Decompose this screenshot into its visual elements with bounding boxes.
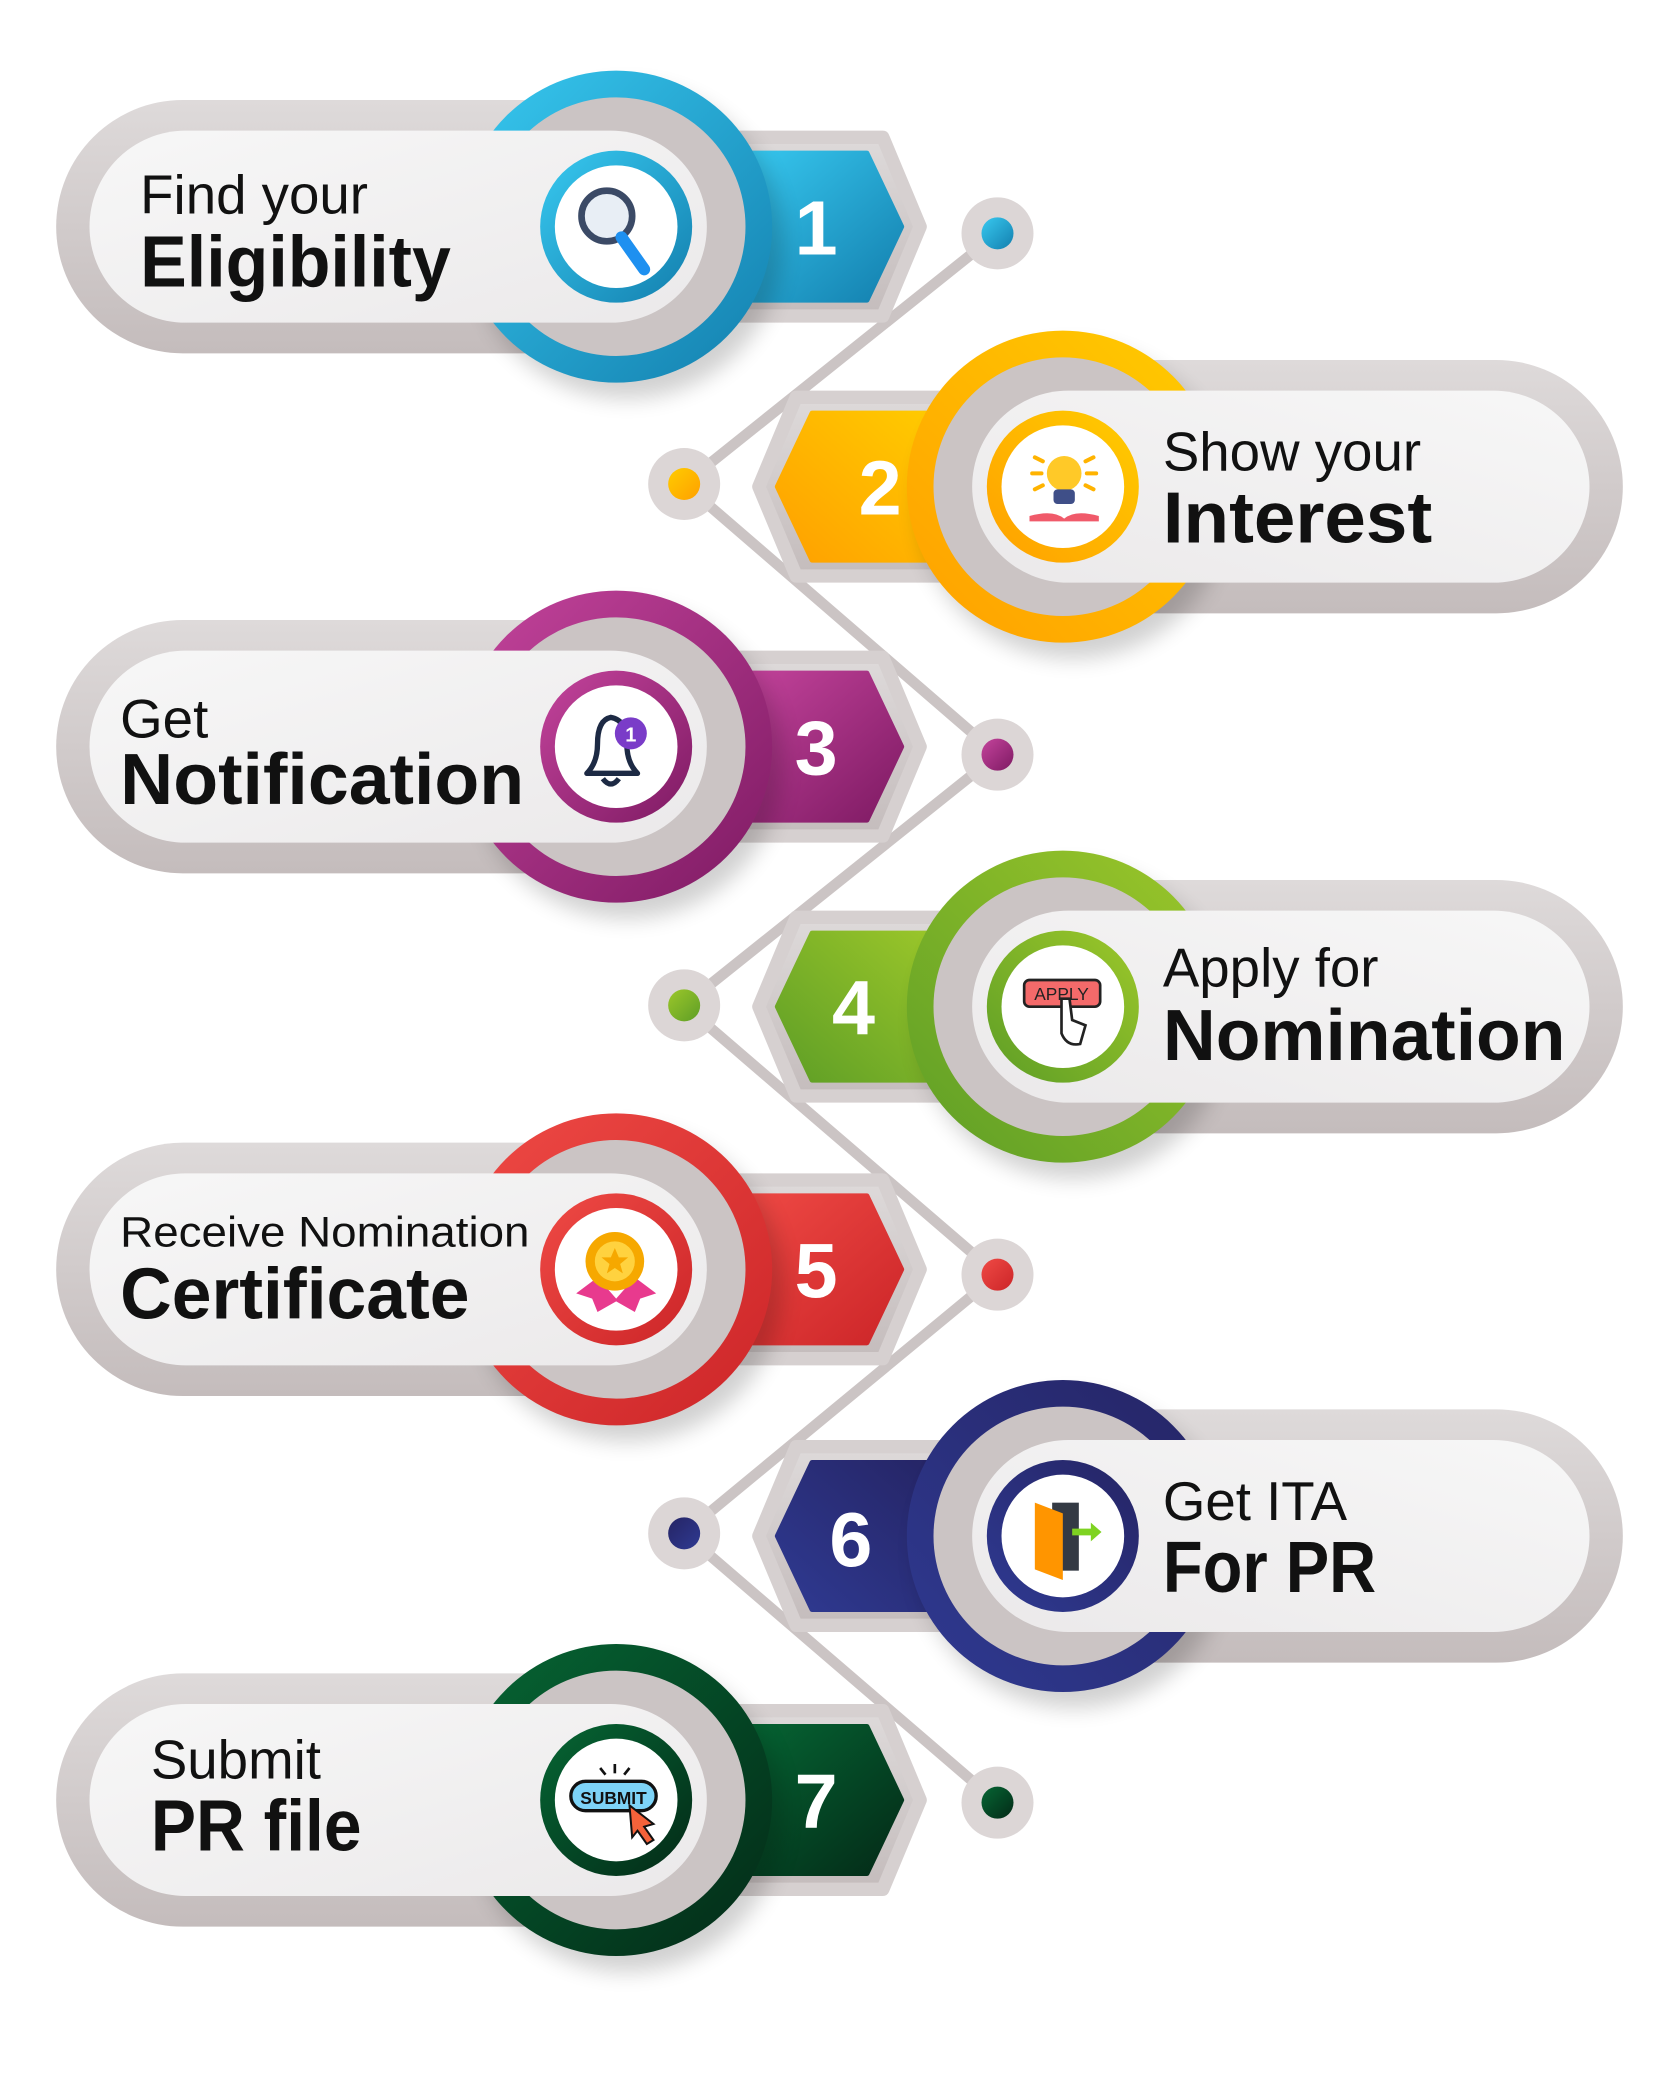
step 3: Get [120,688,208,749]
step 2 [759,331,1623,659]
step 7: PR file [151,1787,362,1867]
dots [648,197,1034,1839]
step 5: Receive Nomination [120,1209,530,1257]
number 1: 1 [795,186,838,272]
step 4 [759,851,1623,1179]
step 3 [56,591,920,919]
number 7: 7 [795,1759,838,1845]
step 7 [56,1644,920,1972]
step 6 [759,1380,1623,1708]
icon: door exit [1035,1503,1102,1580]
icon: submit button [571,1764,656,1844]
number 6: 6 [829,1498,872,1584]
step 1: Eligibility [140,223,451,303]
step 4: Nomination [1163,996,1566,1076]
icon: magnifier [582,191,644,269]
step 5 [56,1113,920,1441]
number 4: 4 [832,966,875,1052]
icon: bell: 1 [625,724,636,746]
step 2: Interest [1163,479,1432,559]
number 3: 3 [795,706,838,792]
step 6: Get ITA [1163,1471,1348,1532]
step 1 [56,71,920,399]
icon: medal [576,1232,656,1312]
text: Find your [140,164,368,225]
icon: submit button: SUBMIT [580,1788,647,1808]
step 4: Apply for [1163,938,1379,999]
icon: apply button [1024,980,1100,1044]
step 2: Show your [1163,422,1421,483]
step 5: Certificate [120,1255,470,1335]
connector line [684,233,998,1803]
icon: lightbulb [1030,456,1099,521]
step 7: Submit [151,1730,321,1791]
icon: apply button: APPLY [1034,984,1089,1004]
icon: bell [587,717,647,784]
number 2: 2 [859,446,902,532]
number 5: 5 [795,1228,838,1314]
step 3: Notification [120,740,524,820]
step 6: For PR [1163,1528,1376,1608]
